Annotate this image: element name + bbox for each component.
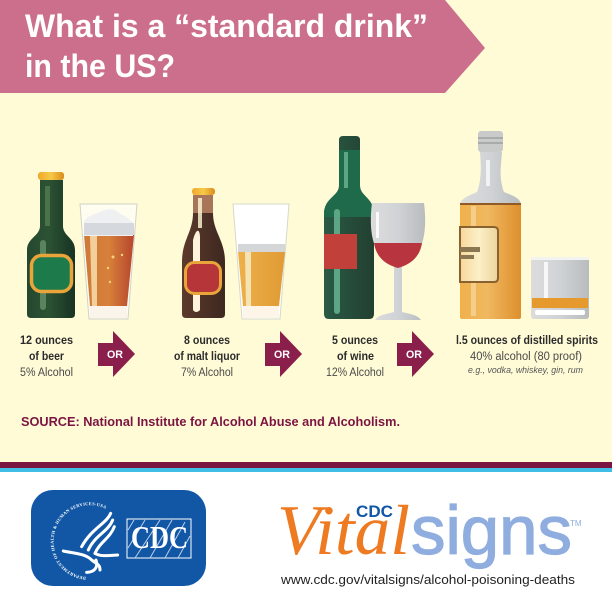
HHS circular text: DEPARTMENT OF HEALTH & HUMAN SERVICES·USA bbox=[50, 502, 106, 580]
label: distilled spirits: e.g., vodka, whiskey, gin, rum bbox=[468, 365, 583, 376]
title banner: in the US? bbox=[25, 48, 175, 84]
arrow: OR 1 bbox=[98, 331, 135, 377]
label: malt liquor: of malt liquor bbox=[174, 351, 240, 363]
icon: spirits bottle bbox=[460, 131, 521, 319]
arrow: OR 3: OR bbox=[406, 349, 422, 361]
icon: wine glass bbox=[371, 203, 425, 320]
label: beer: 12 ounces bbox=[20, 335, 73, 347]
label: malt liquor: 8 ounces bbox=[184, 335, 230, 347]
title banner: What is a “standard drink” bbox=[25, 8, 428, 44]
footer stripes and white panel bbox=[0, 462, 612, 612]
logo: CDC Vital Signs: CDC bbox=[356, 502, 393, 521]
label: distilled spirits bbox=[456, 335, 598, 376]
label: distilled spirits: 40% alcohol (80 proof) bbox=[470, 351, 582, 363]
icon: beer bottle bbox=[27, 172, 75, 318]
logo: CDC Vital Signs: Vital bbox=[277, 492, 410, 570]
label: distilled spirits: l.5 ounces of distilled spirits bbox=[456, 335, 598, 347]
icon: spirits tumbler bbox=[531, 257, 589, 319]
label: beer bbox=[20, 335, 73, 379]
arrow: OR 2: OR bbox=[274, 349, 290, 361]
icon: malt liquor glass bbox=[233, 204, 289, 319]
icon: wine bottle bbox=[324, 136, 374, 319]
logo: CDC Vital Signs bbox=[277, 492, 582, 570]
label: wine bbox=[326, 335, 384, 379]
label: wine: of wine bbox=[337, 351, 374, 363]
CDC box: CDC bbox=[131, 519, 188, 555]
arrow: OR 3 bbox=[397, 331, 434, 377]
logo: HHS and CDC bbox=[31, 490, 206, 586]
label: wine: 5 ounces bbox=[332, 335, 378, 347]
label: beer: 5% Alcohol bbox=[20, 367, 73, 379]
arrow: OR 1: OR bbox=[107, 349, 123, 361]
website url: www.cdc.gov/vitalsigns/alcohol-poisoning-deaths bbox=[280, 573, 575, 587]
label: malt liquor: 7% Alcohol bbox=[181, 367, 233, 379]
cream background bbox=[0, 0, 612, 462]
label: beer: of beer bbox=[29, 351, 64, 363]
arrow: OR 2 bbox=[265, 331, 302, 377]
icon: beer glass bbox=[80, 204, 137, 319]
source note: SOURCE: National Institute for Alcohol Abuse and Alcoholism. bbox=[21, 415, 400, 429]
label: malt liquor bbox=[174, 335, 240, 379]
icon: malt liquor bottle bbox=[182, 188, 225, 318]
label: wine: 12% Alcohol bbox=[326, 367, 384, 379]
icon: HHS eagle bbox=[63, 513, 118, 572]
logo: CDC Vital Signs: signs bbox=[411, 492, 572, 569]
title banner bbox=[0, 0, 485, 93]
logo: CDC Vital Signs: TM bbox=[570, 519, 582, 528]
